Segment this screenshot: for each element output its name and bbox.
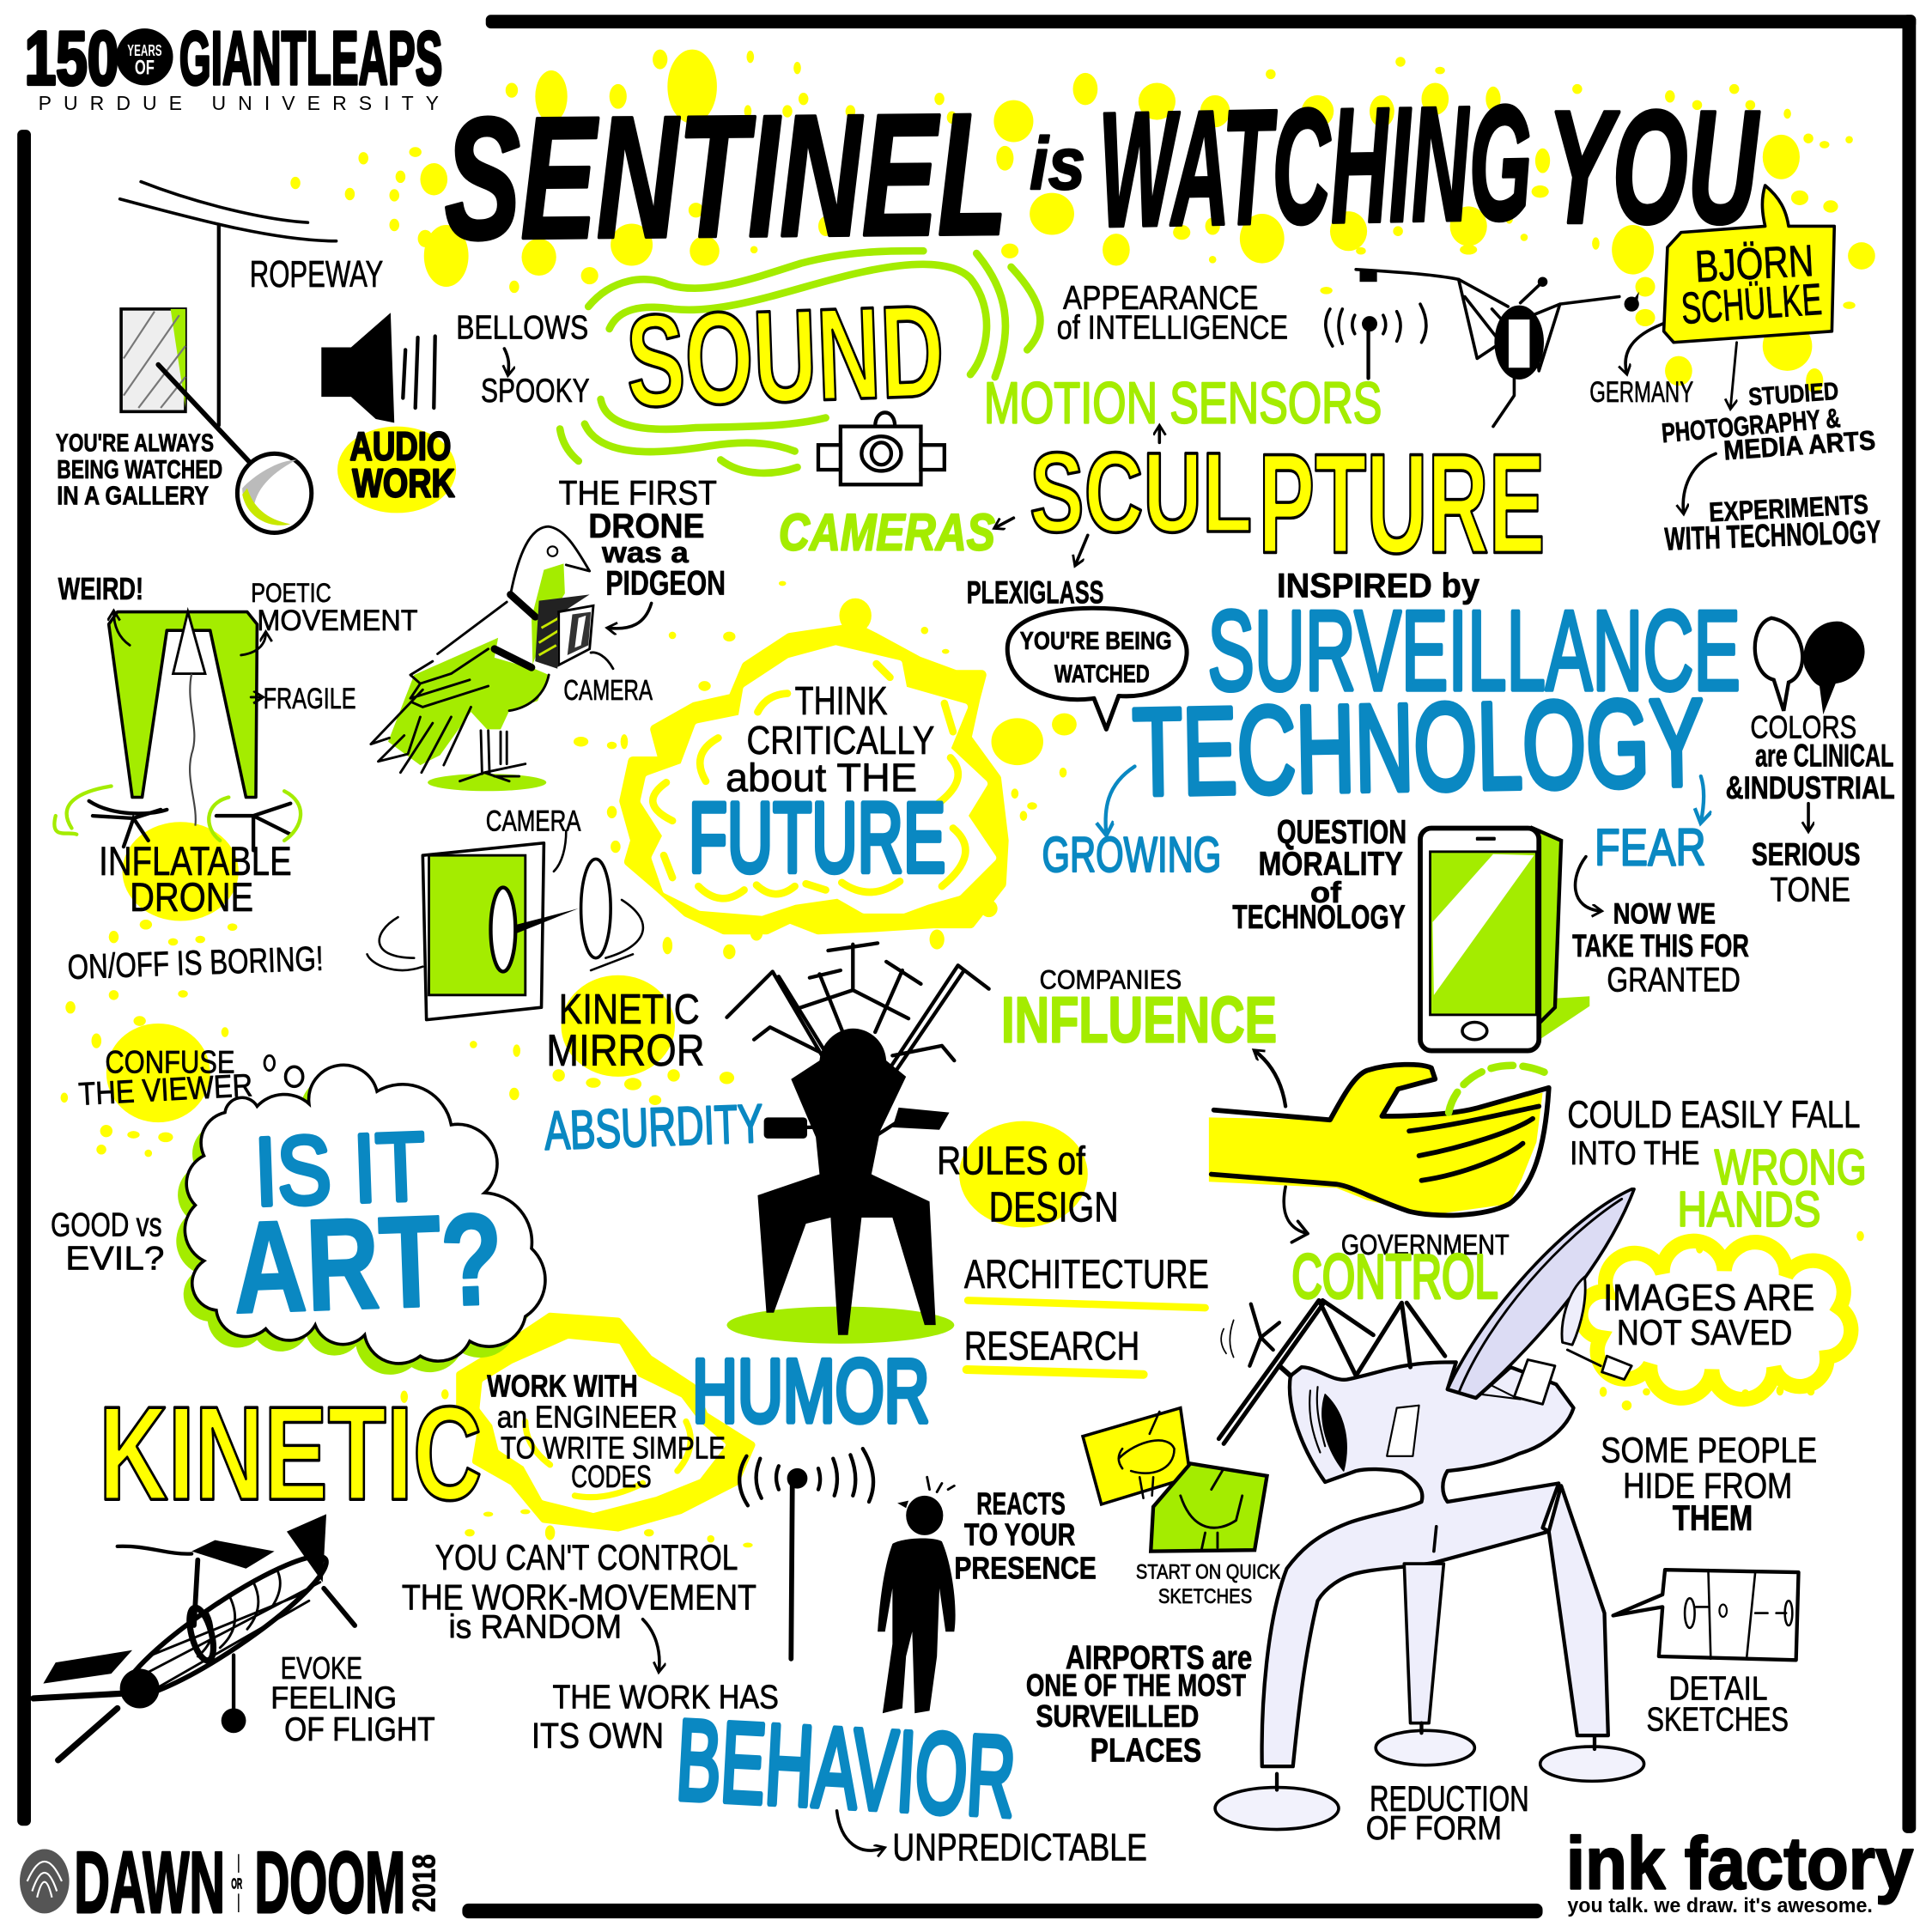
text: could easily fall xyxy=(1567,1094,1867,1237)
text: first drone pigeon: was a xyxy=(601,537,690,569)
text: reacts to your presence xyxy=(954,1485,1097,1585)
icon: kinetic mirror xyxy=(368,830,643,1020)
text: evoke feeling of flight: FEELING xyxy=(270,1680,397,1715)
text: first drone pigeon: THE FIRST xyxy=(559,473,717,512)
text: question morality: of xyxy=(1310,877,1341,909)
text: the work has its own: ITS OWN xyxy=(532,1716,664,1756)
icon: signal antenna top xyxy=(1326,304,1426,378)
text: could easily fall: COULD EASILY FALL xyxy=(1567,1094,1861,1136)
text: reduction of form xyxy=(1366,1778,1529,1847)
text: bellows spooky xyxy=(456,309,590,410)
text: reacts to your presence: REACTS xyxy=(976,1485,1066,1521)
yellow splatter behind title xyxy=(290,50,1875,393)
heading: absurdity: ABSURDITY xyxy=(544,1094,764,1162)
text: confuse the viewer: THE VIEWER xyxy=(77,1066,253,1112)
text: detail sketches: DETAIL xyxy=(1668,1670,1768,1707)
logo: 150 years of giant leaps: YEARS xyxy=(127,41,162,59)
logo: dawn or doom 2018: DAWN xyxy=(74,1835,225,1931)
cloud: is it art: IS IT xyxy=(252,1112,427,1226)
text: airports: AIRPORTS are xyxy=(1066,1639,1252,1676)
text: question morality: QUESTION xyxy=(1277,814,1406,851)
icon: pigeon with camera xyxy=(371,526,652,791)
heading: humor: HUMOR xyxy=(692,1340,930,1440)
text: unpredictable: UNPREDICTABLE xyxy=(892,1827,1147,1869)
text: now we take this: NOW WE xyxy=(1613,897,1716,930)
text: weird poetic fragile: MOVEMENT xyxy=(257,605,418,637)
text: airports: ONE OF THE MOST xyxy=(1026,1668,1246,1703)
text: camera mirror: CAMERA xyxy=(486,805,581,837)
icon: inflatable drone xyxy=(54,612,301,850)
yellow underlines xyxy=(967,1300,1206,1375)
text: detail sketches: SKETCHES xyxy=(1646,1701,1789,1738)
text: rules of design: RULES of xyxy=(937,1139,1085,1183)
text: start on quick sketches: START ON QUICK xyxy=(1136,1560,1281,1583)
speech box: Bjorn Schulke: BJÖRN xyxy=(1694,235,1815,291)
text: colors clinical xyxy=(1726,708,1895,908)
text: images not saved: NOT SAVED xyxy=(1617,1312,1792,1352)
text: question morality xyxy=(1232,814,1406,936)
text: ropeway: ROPEWAY xyxy=(250,254,383,295)
text: weird poetic fragile: WEIRD! xyxy=(58,571,143,606)
heading: growing: GROWING xyxy=(1042,828,1221,883)
text: evoke feeling of flight: EVOKE xyxy=(281,1650,362,1686)
text: start on quick sketches xyxy=(1136,1560,1281,1608)
text: research: RESEARCH xyxy=(964,1323,1139,1369)
text: engineer: TO WRITE SIMPLE xyxy=(501,1431,726,1466)
text: could easily fall: WRONG xyxy=(1715,1140,1867,1195)
text: first drone pigeon: DRONE xyxy=(588,507,705,545)
text: audio work: WORK xyxy=(352,461,455,506)
text: weird poetic fragile: POETIC xyxy=(251,577,331,608)
text: audio work: AUDIO xyxy=(349,424,451,469)
text: always being watched: YOU'RE ALWAYS xyxy=(56,429,214,457)
text: some people xyxy=(1601,1430,1817,1538)
text: question morality: MORALITY xyxy=(1258,846,1403,883)
text: companies: COMPANIES xyxy=(1040,964,1182,995)
text: engineer xyxy=(487,1369,726,1494)
text: government: GOVERNMENT xyxy=(1341,1230,1510,1261)
title: SENTINEL xyxy=(444,77,1008,276)
text: reacts to your presence: PRESENCE xyxy=(954,1550,1097,1585)
text: inflatable drone xyxy=(99,839,292,920)
title: YOU xyxy=(1547,77,1759,257)
logo: ink factory: ink factory xyxy=(1566,1823,1913,1905)
text: engineer: CODES xyxy=(571,1459,652,1494)
icon: antenna bottom xyxy=(739,1449,873,1659)
text: weird poetic fragile xyxy=(58,571,418,715)
speech box: Bjorn Schulke xyxy=(1664,185,1834,343)
icon: phone xyxy=(1420,828,1589,1051)
text: airports: PLACES xyxy=(1091,1732,1201,1769)
icon: speaker xyxy=(321,313,435,422)
yellow highlight blobs xyxy=(61,427,1088,1227)
text: could easily fall: INTO THE xyxy=(1570,1135,1699,1172)
text: always being watched: BEING WATCHED xyxy=(57,456,222,484)
title: is xyxy=(1030,123,1085,205)
text: colors clinical: COLORS xyxy=(1750,708,1856,744)
logo: dawn or doom 2018: DOOM xyxy=(255,1835,405,1931)
text: plexiglass: PLEXIGLASS xyxy=(967,574,1104,610)
text: biography: MEDIA ARTS xyxy=(1722,424,1876,465)
text: think critically about the: THINK xyxy=(795,678,888,723)
text: evoke feeling of flight: OF FLIGHT xyxy=(284,1711,435,1748)
text: airports xyxy=(1026,1639,1252,1769)
text: question morality: TECHNOLOGY xyxy=(1232,899,1406,936)
text: confuse the viewer: CONFUSE xyxy=(105,1044,235,1080)
heading: sculpture: PTURE xyxy=(1258,424,1545,583)
heading: sculpture xyxy=(1030,424,1545,583)
speech bubble: you're being watched: WATCHED xyxy=(1054,661,1150,689)
text: reduction of form: OF FORM xyxy=(1366,1810,1502,1847)
heading: control: CONTROL xyxy=(1291,1243,1498,1312)
icon: white and black speech bubbles xyxy=(1755,618,1865,714)
text: some people: SOME PEOPLE xyxy=(1601,1430,1817,1470)
text: think critically about the xyxy=(726,678,934,799)
text: appearance of intelligence xyxy=(1057,280,1288,346)
text: always being watched xyxy=(56,429,222,510)
text: evoke feeling of flight xyxy=(270,1650,435,1748)
text: engineer: WORK WITH xyxy=(487,1369,638,1404)
yellow cloud: future xyxy=(624,628,1004,930)
text: detail sketches xyxy=(1646,1670,1789,1738)
text: think critically about the: about THE xyxy=(726,755,917,799)
heading: motion sensors: MOTION SENSORS xyxy=(984,371,1382,435)
text: engineer: an ENGINEER xyxy=(497,1400,677,1435)
text: on off boring: ON/OFF IS BORING! xyxy=(67,939,324,987)
icon: person xyxy=(878,1477,956,1713)
speech bubble: you're being watched: YOU'RE BEING xyxy=(1020,628,1172,655)
text: you can't control xyxy=(402,1537,756,1645)
text: you can't control: YOU CAN'T CONTROL xyxy=(435,1537,738,1577)
text: you can't control: is RANDOM xyxy=(449,1608,622,1645)
heading: kinetic: KINETIC xyxy=(99,1378,482,1528)
logo: 150 years of giant leaps: GIANTLEAPS xyxy=(179,16,442,100)
logo: dawn or doom 2018: OR xyxy=(231,1875,242,1893)
text: good vs evil: EVIL? xyxy=(65,1240,164,1277)
speech bubble: you're being watched xyxy=(1007,608,1187,729)
text: reacts to your presence: TO YOUR xyxy=(964,1516,1075,1552)
text: now we take this xyxy=(1572,897,1749,999)
text: you can't control: THE WORK-MOVEMENT xyxy=(402,1577,756,1617)
title xyxy=(444,72,1759,276)
text: biography xyxy=(1661,378,1881,557)
text: confuse the viewer xyxy=(77,1044,253,1112)
text: images not saved: IMAGES ARE xyxy=(1603,1278,1814,1319)
text: colors clinical: TONE xyxy=(1770,870,1850,908)
detail sketch box xyxy=(1613,1570,1799,1660)
yellow cloud: images not saved xyxy=(1581,1231,1864,1411)
text: colors clinical: SERIOUS xyxy=(1752,836,1861,872)
text: start on quick sketches: SKETCHES xyxy=(1158,1585,1252,1608)
logo: 150 years of giant leaps xyxy=(25,16,442,114)
logo: 150 years of giant leaps: PURDUE UNIVERSITY xyxy=(39,92,439,114)
icon: kinetic plane sculpture xyxy=(33,1514,355,1760)
logo: 150 years of giant leaps: OF xyxy=(135,56,155,79)
text: airports: SURVEILLED xyxy=(1036,1698,1199,1734)
icon: ropeway mirror xyxy=(120,182,337,532)
arrows near Bjorn xyxy=(504,324,1737,565)
cloud: is it art: ART? xyxy=(231,1187,505,1341)
text: could easily fall: HANDS xyxy=(1677,1182,1820,1237)
text: now we take this: TAKE THIS FOR xyxy=(1572,927,1749,963)
heading: future: FUTURE xyxy=(689,783,945,893)
heading: behavior: BEHAVIOR xyxy=(673,1697,1018,1841)
text: architecture: ARCHITECTURE xyxy=(964,1252,1209,1297)
text: kinetic mirror: MIRROR xyxy=(546,1025,705,1075)
text: germany: GERMANY xyxy=(1589,376,1693,409)
heading: sound: SOUND xyxy=(624,278,946,435)
sculpture: central black figure xyxy=(726,943,989,1344)
text: now we take this: GRANTED xyxy=(1607,961,1741,999)
logo: 150 years of giant leaps: 150 xyxy=(25,16,118,100)
text: biography: STUDIED xyxy=(1747,378,1839,411)
text: appearance of intelligence: of INTELLIGENCE xyxy=(1057,309,1288,346)
text: reduction of form: REDUCTION xyxy=(1370,1778,1529,1819)
heading: sculpture: SCUL xyxy=(1030,429,1252,556)
cloud: is it art xyxy=(176,1055,545,1375)
text: rules of design xyxy=(937,1139,1119,1230)
text: inspired by: INSPIRED by xyxy=(1277,566,1480,605)
text: good vs evil xyxy=(51,1207,164,1277)
yellow cloud: engineer xyxy=(400,1316,753,1547)
text: the work has its own: THE WORK HAS xyxy=(552,1679,779,1716)
quick sketches xyxy=(1083,1408,1267,1552)
arrows: black small xyxy=(643,804,1808,1850)
green sound waves xyxy=(560,251,1040,473)
text: always being watched: IN A GALLERY xyxy=(57,482,209,510)
text: kinetic mirror xyxy=(546,987,705,1075)
text: kinetic mirror: KINETIC xyxy=(559,987,700,1033)
text: first drone pigeon: PIDGEON xyxy=(605,563,726,602)
text: think critically about the: CRITICALLY xyxy=(746,718,934,762)
text: images not saved xyxy=(1603,1278,1814,1352)
logo: dawn or doom 2018 xyxy=(20,1835,442,1931)
icon: drone sculpture top right xyxy=(1356,270,1639,427)
heading: fear: FEAR xyxy=(1595,818,1706,877)
text: rules of design: DESIGN xyxy=(989,1184,1119,1230)
text: weird poetic fragile: FRAGILE xyxy=(264,683,356,715)
heading: influence: INFLUENCE xyxy=(1001,984,1277,1056)
text: biography: PHOTOGRAPHY & xyxy=(1661,402,1842,448)
logo: dawn or doom 2018: 2018 xyxy=(406,1854,442,1912)
icon: yellow hand xyxy=(1209,1065,1552,1215)
text: some people: THEM xyxy=(1673,1498,1753,1538)
logo: ink factory: you talk. we draw. it's awesome. xyxy=(1567,1894,1873,1917)
speech box: Bjorn Schulke: SCHÜLKE xyxy=(1680,274,1824,333)
text: biography: EXPERIMENTS xyxy=(1708,489,1869,527)
large white sculpture xyxy=(1215,1189,1644,1830)
text: the work has its own xyxy=(532,1679,779,1756)
text: inflatable drone: INFLATABLE xyxy=(99,839,292,884)
text: good vs evil: GOOD vs xyxy=(51,1207,162,1244)
text: bellows spooky: BELLOWS xyxy=(456,309,588,346)
text: appearance of intelligence: APPEARANCE xyxy=(1063,280,1258,317)
heading: cameras: CAMERAS xyxy=(779,503,995,562)
text: bellows spooky: SPOOKY xyxy=(481,373,590,410)
icon: camera box xyxy=(818,412,945,484)
text: audio work xyxy=(349,424,455,506)
text: camera pigeon: CAMERA xyxy=(563,675,653,707)
text: first drone pigeon xyxy=(559,473,726,602)
text: some people: HIDE FROM xyxy=(1623,1466,1792,1506)
arrows: technology xyxy=(1106,767,1704,835)
text: inflatable drone: DRONE xyxy=(130,875,253,920)
